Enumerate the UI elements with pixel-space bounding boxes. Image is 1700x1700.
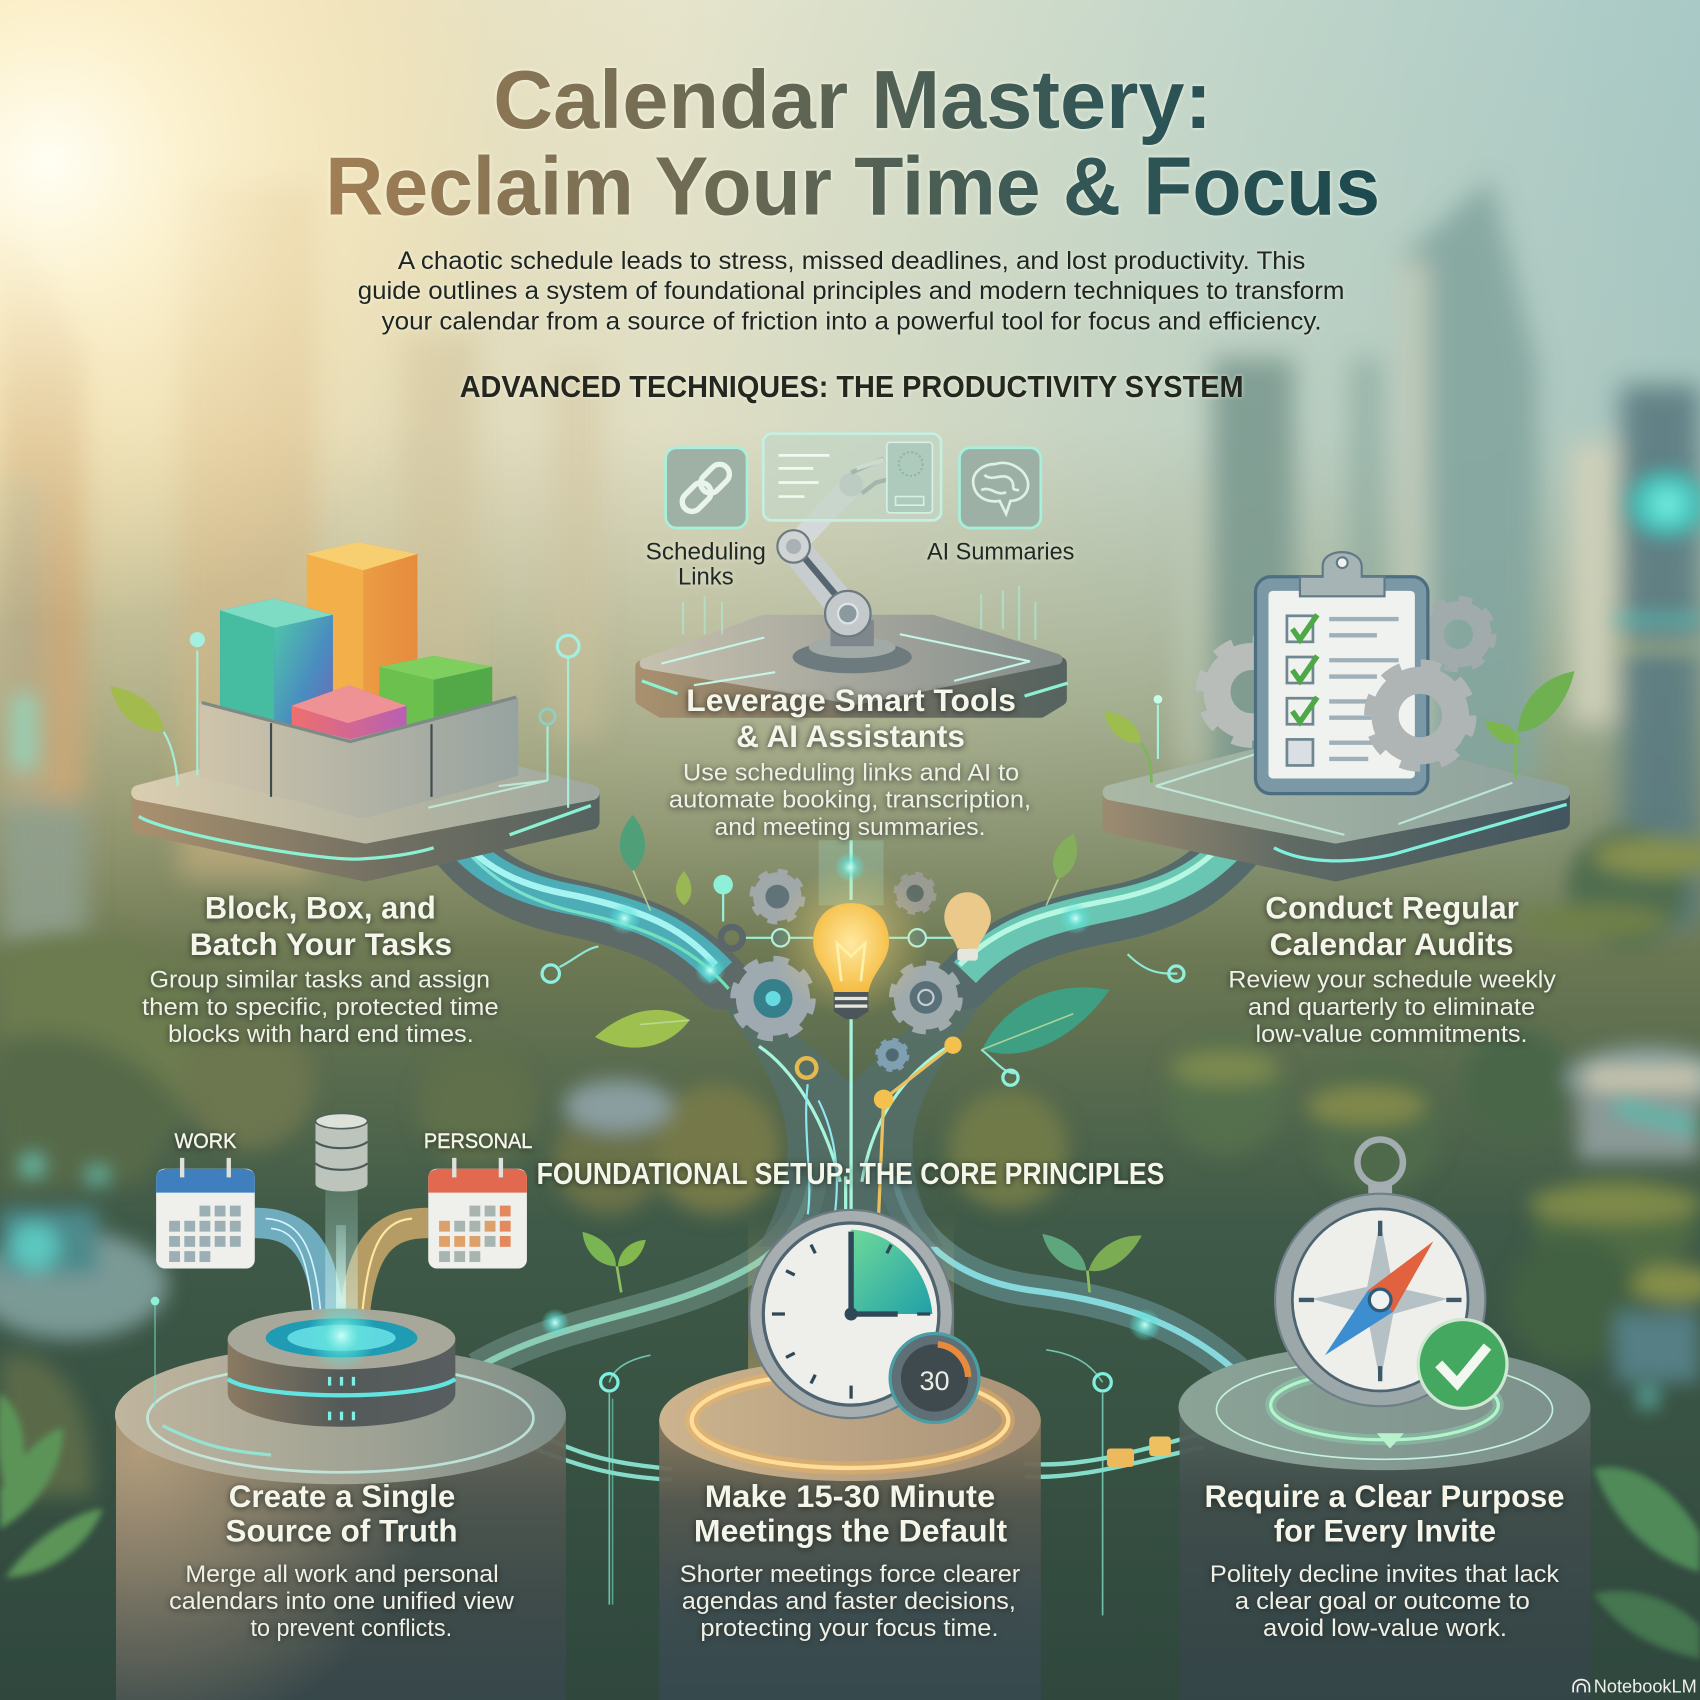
text: single source of truth: Create a Single: [229, 1479, 455, 1514]
panel: short meetings pedestal: [659, 1210, 1041, 1700]
text: conduct regular audits: Conduct Regular: [1265, 890, 1519, 925]
watermark: NotebookLM: NotebookLM: [1594, 1675, 1697, 1696]
intro paragraph: guide outlines a system of foundational principles and modern techniques to transform: [358, 277, 1344, 305]
icon: AI screen panel: [763, 434, 941, 520]
intro paragraph: [358, 247, 1344, 336]
text: leverage smart tools: Use scheduling links and AI to: [683, 760, 1019, 787]
text: single source of truth: Merge all work and personal: [185, 1561, 499, 1588]
title: Calendar Mastery:: [493, 54, 1212, 146]
title: Reclaim Your Time & Focus: [325, 141, 1380, 233]
stream: central tree trunk and branches: [428, 800, 1268, 1279]
label: Scheduling Links: Links: [678, 563, 734, 590]
text: conduct regular audits: Review your schedule weekly: [1228, 967, 1556, 994]
text: clear purpose: Politely decline invites that lack: [1210, 1561, 1559, 1588]
text: block box and batch: Batch Your Tasks: [190, 927, 452, 962]
text: conduct regular audits: and quarterly to eliminate: [1248, 994, 1535, 1021]
icon: sprouts: [1097, 659, 1580, 783]
icon: personal calendar: [428, 1158, 527, 1268]
text: clear purpose: [1205, 1479, 1564, 1642]
text: short meetings default: Make 15-30 Minute: [705, 1479, 995, 1514]
panel: single source of truth pedestal: [115, 1113, 613, 1700]
icon: 30 minute timer: 30: [919, 1365, 950, 1396]
text: block box and batch: [142, 890, 499, 1048]
label: AI Summaries: AI Summaries: [927, 538, 1074, 565]
text: short meetings default: agendas and faster decisions,: [682, 1588, 1016, 1615]
text: leverage smart tools: [669, 683, 1031, 841]
stream: lower connections between pedestals: [477, 1176, 1236, 1615]
text: clear purpose: a clear goal or outcome to: [1235, 1588, 1530, 1615]
intro paragraph: your calendar from a source of friction into a powerful tool for focus and efficiency.: [382, 308, 1322, 336]
leaves: tree branches: [592, 814, 1116, 1078]
label: work: WORK: [175, 1128, 237, 1153]
icon: database: [315, 1113, 368, 1192]
icon: work calendar: [156, 1158, 255, 1268]
text: short meetings default: protecting your focus time.: [700, 1615, 999, 1642]
icon: green check badge: [1418, 1319, 1507, 1408]
label: Scheduling Links: Scheduling: [646, 538, 766, 565]
text: conduct regular audits: low-value commitments.: [1255, 1021, 1528, 1048]
text: leverage smart tools: automate booking, transcription,: [669, 787, 1031, 814]
text: conduct regular audits: Calendar Audits: [1270, 927, 1514, 962]
text: short meetings default: Shorter meetings force clearer: [680, 1561, 1020, 1588]
icon: compass: [1275, 1139, 1485, 1406]
text: block box and batch: them to specific, protected time: [142, 994, 499, 1021]
text: short meetings default: [680, 1479, 1020, 1642]
icon: clipboard checklist: [1255, 552, 1428, 794]
text: clear purpose: avoid low-value work.: [1263, 1615, 1507, 1642]
intro paragraph: A chaotic schedule leads to stress, missed deadlines, and lost productivity. This: [398, 247, 1305, 275]
icon: central gears and light bulbs: [713, 863, 991, 1069]
icon: sprout right: [1034, 1223, 1145, 1292]
heading: foundational setup: FOUNDATIONAL SETUP: THE CORE PRINCIPLES: [537, 1158, 1164, 1191]
icon: merging streams: [255, 1187, 428, 1339]
icon: sprout left: [574, 1229, 649, 1292]
panel: block box and batch platform: [100, 542, 592, 874]
text: short meetings default: Meetings the Default: [694, 1514, 1008, 1549]
text: block box and batch: Group similar tasks and assign: [150, 967, 490, 994]
text: clear purpose: for Every Invite: [1274, 1514, 1496, 1549]
icon: front gear: [1373, 668, 1468, 763]
text: block box and batch: Block, Box, and: [205, 890, 436, 925]
icon: robot arm: [777, 459, 912, 673]
icon: brain: [960, 448, 1041, 528]
text: conduct regular audits: [1228, 890, 1556, 1048]
text: leverage smart tools: & AI Assistants: [736, 719, 965, 754]
text: clear purpose: Require a Clear Purpose: [1205, 1479, 1564, 1514]
icon: scheduling link: [666, 448, 747, 528]
panel: calendar audit platform: [1097, 552, 1580, 874]
text: single source of truth: [169, 1479, 515, 1642]
text: leverage smart tools: and meeting summaries.: [714, 814, 986, 841]
icon: server hub: [228, 1301, 455, 1427]
heading: advanced techniques: ADVANCED TECHNIQUES: THE PRODUCTIVITY SYSTEM: [460, 371, 1244, 404]
text: single source of truth: to prevent conflicts.: [250, 1615, 452, 1642]
title: [325, 54, 1380, 233]
icon: 30 minute timer: [890, 1334, 979, 1422]
label: personal: PERSONAL: [424, 1128, 532, 1153]
text: single source of truth: calendars into one unified view: [169, 1588, 515, 1615]
panel: smart tools platform and robot arm: [642, 459, 1068, 711]
text: single source of truth: Source of Truth: [226, 1514, 458, 1549]
text: block box and batch: blocks with hard end times.: [168, 1021, 474, 1048]
icon: clock: [749, 1210, 953, 1418]
text: leverage smart tools: Leverage Smart Tools: [686, 683, 1016, 718]
icon: gears behind clipboard: [1205, 602, 1490, 739]
panel: clear purpose pedestal: [1179, 1139, 1590, 1700]
icon: coloured task blocks in tray: [202, 542, 516, 816]
icon: sprout and pins: [100, 632, 579, 808]
